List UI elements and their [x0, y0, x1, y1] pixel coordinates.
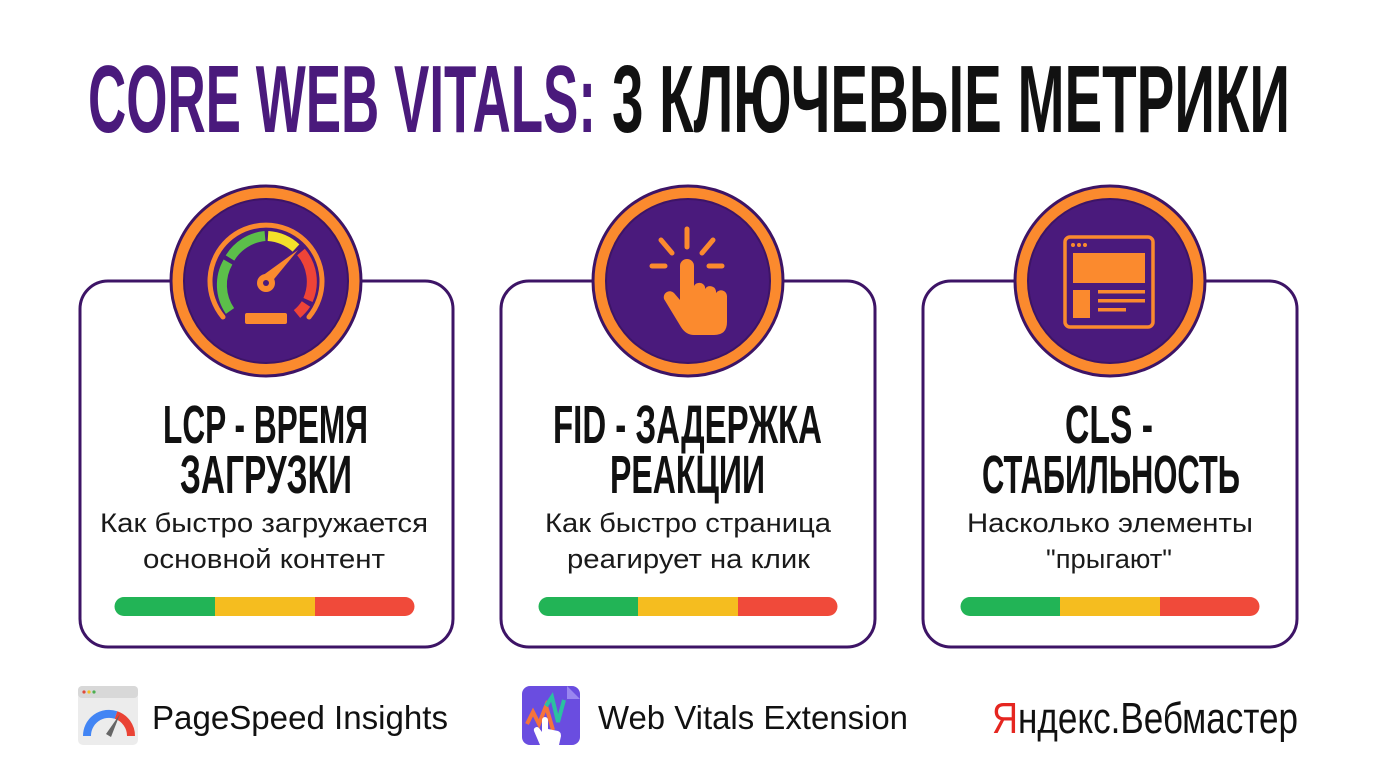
bar: CLS scale — [961, 597, 1259, 616]
tool: PageSpeed Insights — [78, 686, 448, 745]
icon: speedometer — [171, 186, 361, 376]
panel: LCP — [80, 186, 453, 647]
panel: FID — [501, 186, 875, 647]
text: CLS description — [967, 508, 1253, 574]
title: CORE WEB VITALS: — [88, 46, 596, 153]
heading: LCP — [163, 395, 368, 505]
text: FID description — [545, 508, 832, 574]
text: CLS description: Насколько элементы — [967, 508, 1253, 538]
icon: Web Vitals — [522, 686, 580, 745]
text: LCP description: Как быстро загружается — [100, 508, 428, 538]
heading: CLS — [982, 395, 1240, 505]
heading: CLS: CLS - — [1065, 395, 1153, 455]
tool: Yandex.Webmaster: ндекс.Вебмастер — [1018, 694, 1298, 743]
panel: CLS — [923, 186, 1297, 647]
text: FID description: реагирует на клик — [567, 544, 810, 574]
tool: Web Vitals Extension — [522, 686, 908, 745]
tool: Web Vitals Extension: Web Vitals Extension — [598, 699, 908, 736]
bar: FID scale — [539, 597, 837, 616]
text: LCP description — [100, 508, 428, 574]
heading: LCP: ЗАГРУЗКИ — [180, 445, 352, 505]
icon: layout — [1015, 186, 1205, 376]
text: LCP description: основной контент — [143, 544, 385, 574]
text: FID description: Как быстро страница — [545, 508, 832, 538]
icon: click hand — [593, 186, 783, 376]
heading: FID — [553, 395, 822, 505]
bar: LCP scale — [115, 597, 414, 616]
heading: FID: РЕАКЦИИ — [610, 445, 765, 505]
heading: LCP: LCP - ВРЕМЯ — [163, 395, 368, 455]
tool: PageSpeed Insights: PageSpeed Insights — [152, 699, 448, 736]
text: CLS description: "прыгают" — [1046, 544, 1172, 574]
heading: FID: FID - ЗАДЕРЖКА — [553, 395, 822, 455]
tool: Yandex.Webmaster: Я — [992, 694, 1018, 743]
icon: PageSpeed — [78, 686, 138, 745]
